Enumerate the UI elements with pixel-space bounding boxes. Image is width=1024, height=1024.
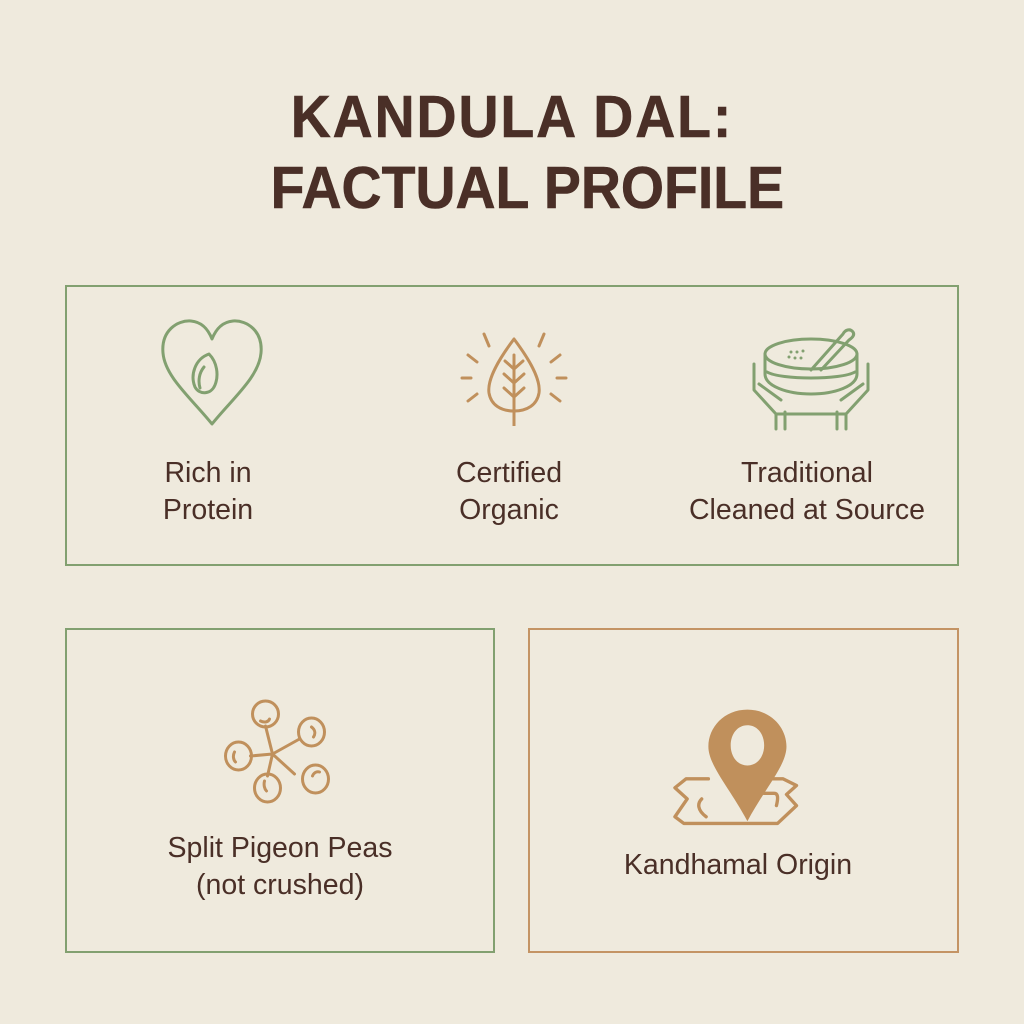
icon: heart with leaf bbox=[161, 319, 263, 426]
label: rich in protein: Protein bbox=[163, 494, 253, 526]
panel: top features bbox=[65, 285, 959, 566]
label: split pigeon peas: Split Pigeon Peas bbox=[168, 832, 392, 864]
icon: map pin bbox=[673, 710, 798, 826]
label: rich in protein: Rich in bbox=[164, 457, 252, 489]
title: FACTUAL PROFILE bbox=[271, 155, 784, 221]
label: split pigeon peas bbox=[168, 832, 392, 901]
label: certified organic bbox=[456, 457, 562, 526]
icon: organic leaf bbox=[460, 332, 568, 426]
label: certified organic: Organic bbox=[459, 494, 559, 526]
label: certified organic: Certified bbox=[456, 457, 562, 489]
label: split pigeon peas: (not crushed) bbox=[196, 869, 364, 901]
title bbox=[271, 84, 784, 221]
icon: hands with mortar bbox=[752, 328, 870, 430]
label: traditional cleaned at source: Traditional bbox=[741, 457, 873, 489]
label: traditional cleaned at source bbox=[689, 457, 925, 526]
icon: peas molecule bbox=[224, 700, 330, 804]
label: kandhamal origin: Kandhamal Origin bbox=[624, 849, 852, 881]
title: KANDULA DAL: bbox=[291, 84, 733, 150]
panel: split pigeon peas bbox=[65, 628, 495, 953]
label: rich in protein bbox=[163, 457, 253, 526]
label: traditional cleaned at source: Cleaned at Source bbox=[689, 494, 925, 526]
panel: kandhamal origin bbox=[528, 628, 959, 953]
